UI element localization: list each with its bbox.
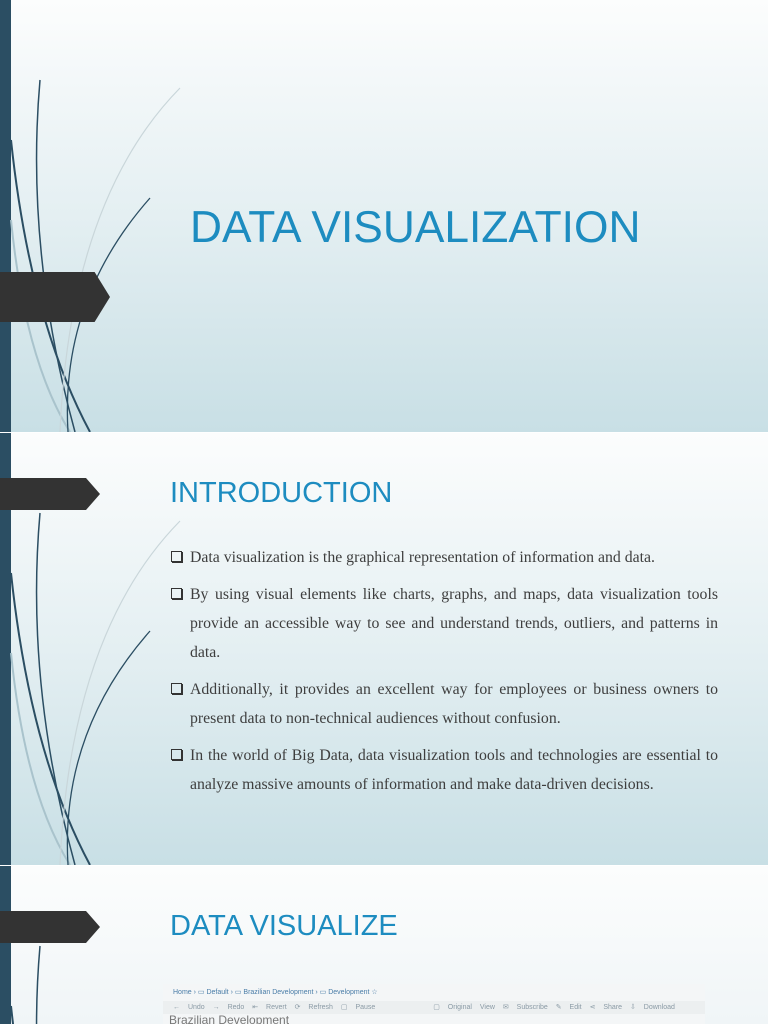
- slide 3: data visualize: [0, 866, 768, 1024]
- screenshot: dashboard: [163, 984, 705, 1024]
- bullet list: Data visualization is the graphical representation of information and data.: [190, 549, 655, 566]
- slide 1: title: [0, 0, 768, 432]
- arrow tab: [0, 272, 110, 322]
- bullet list: [171, 549, 718, 793]
- arrow tab: [0, 478, 100, 510]
- bullet list: By using visual elements like charts, graphs, and maps, data visualization tools provide an accessible way to see and understand trends, outliers, and patterns in data.: [190, 586, 718, 661]
- heading: introduction: INTRODUCTION: [170, 477, 392, 509]
- bullet list: In the world of Big Data, data visualization tools and technologies are essential to analyze massive amounts of information and make data-driven decisions.: [190, 747, 718, 793]
- title: DATA VISUALIZATION: [190, 203, 640, 252]
- screenshot: dashboard: ← Undo → Redo ⇤ Revert ⟳ Refresh ▢ Pause ▢ Original View ✉ Subscribe ✎ Edit ⋖ Share ⇩ Download: [173, 1004, 675, 1011]
- slide 2: introduction: [0, 433, 768, 865]
- bullet list: Additionally, it provides an excellent way for employees or business owners to present data to non-technical audiences without confusion.: [190, 681, 718, 727]
- screenshot: dashboard: Home › ▭ Default › ▭ Brazilian Development › ▭ Development ☆: [173, 989, 378, 996]
- heading: data visualize: DATA VISUALIZE: [170, 910, 398, 942]
- arrow tab: [0, 911, 100, 943]
